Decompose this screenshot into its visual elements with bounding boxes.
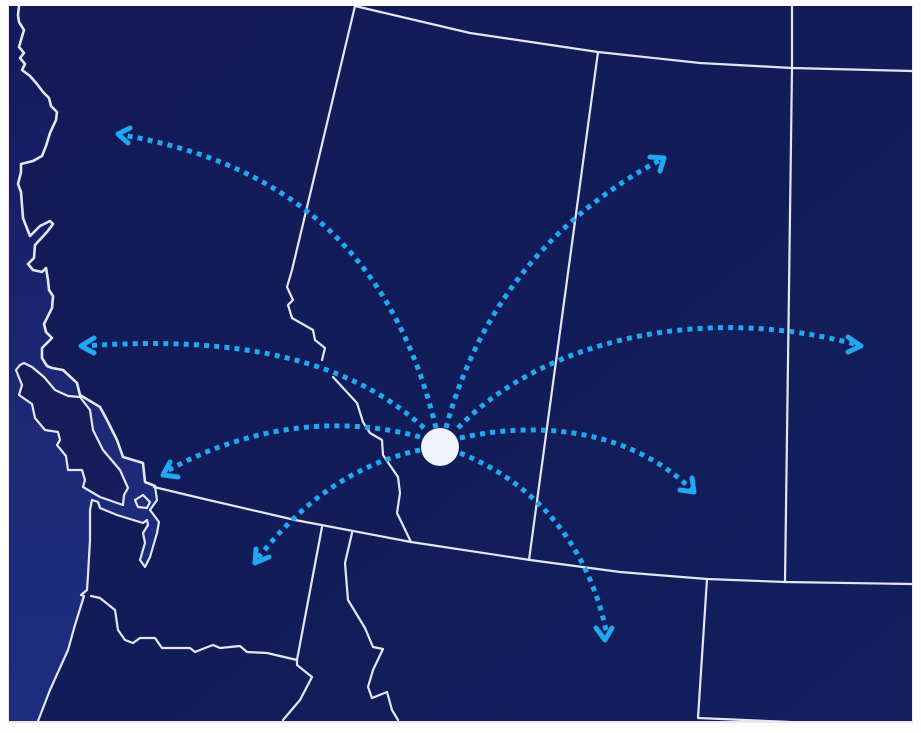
49th parallel bbox=[154, 487, 912, 584]
Vancouver Island bbox=[16, 363, 128, 505]
arrow: east-southeast bbox=[460, 430, 694, 492]
Saskatchewan Manitoba border bbox=[785, 6, 792, 582]
Alberta Saskatchewan border bbox=[529, 52, 598, 560]
arrow: southwest bbox=[255, 450, 420, 563]
arrow: east bbox=[458, 328, 861, 428]
arrow: west bbox=[81, 338, 424, 428]
Puget Sound island bbox=[135, 495, 150, 508]
arrow: south-southeast bbox=[460, 453, 612, 640]
arrow: north-northeast bbox=[446, 157, 664, 428]
arrow: northwest bbox=[118, 128, 436, 428]
Puget Sound and peninsula bbox=[38, 486, 159, 721]
ocean background bbox=[9, 6, 158, 721]
Idaho Montana border bbox=[345, 533, 398, 720]
Washington Idaho border bbox=[297, 527, 322, 660]
Wyoming border bbox=[698, 579, 790, 722]
Washington Oregon border bbox=[91, 596, 312, 720]
origin point bbox=[421, 428, 459, 466]
BC Alberta border bbox=[287, 6, 411, 542]
mainland coast bbox=[18, 6, 155, 486]
60th parallel bbox=[355, 6, 912, 71]
arrow: west-southwest bbox=[163, 426, 420, 477]
dotted arrows bbox=[81, 128, 861, 640]
